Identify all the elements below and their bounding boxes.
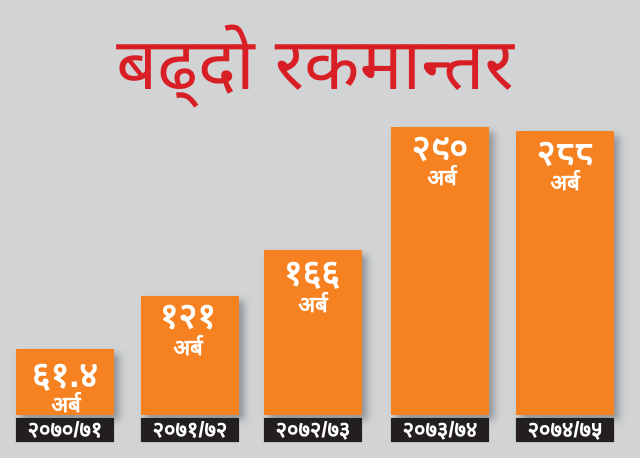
unit: arba: अर्ब: [51, 392, 81, 417]
year label: 2073/74: २०७३/७४: [403, 417, 477, 442]
year label: 2071/72: २०७१/७२: [153, 417, 227, 442]
value: 290: २९०: [412, 127, 468, 168]
unit: arba: अर्ब: [550, 170, 580, 195]
value: 288: २८८: [537, 132, 593, 173]
bar: 2072/73: [264, 250, 362, 415]
bar: 2070/71: [16, 349, 114, 415]
year label: 2074/75: २०७४/७५: [528, 417, 602, 442]
bar: 2074/75: [516, 131, 614, 415]
value: 166: १६६: [284, 252, 340, 293]
value: 121: १२१: [160, 295, 216, 336]
bar: 2071/72: [141, 296, 239, 415]
year label: 2070/71: २०७०/७१: [28, 417, 102, 442]
value: 61.4: ६१.४: [32, 354, 98, 395]
unit: arba: अर्ब: [298, 292, 328, 317]
title: बढ्दो रकमान्तर: [116, 25, 514, 105]
bar: 2073/74: [391, 127, 489, 415]
year label: 2072/73: २०७२/७३: [276, 417, 350, 442]
unit: arba: अर्ब: [173, 335, 203, 360]
unit: arba: अर्ब: [427, 165, 457, 190]
